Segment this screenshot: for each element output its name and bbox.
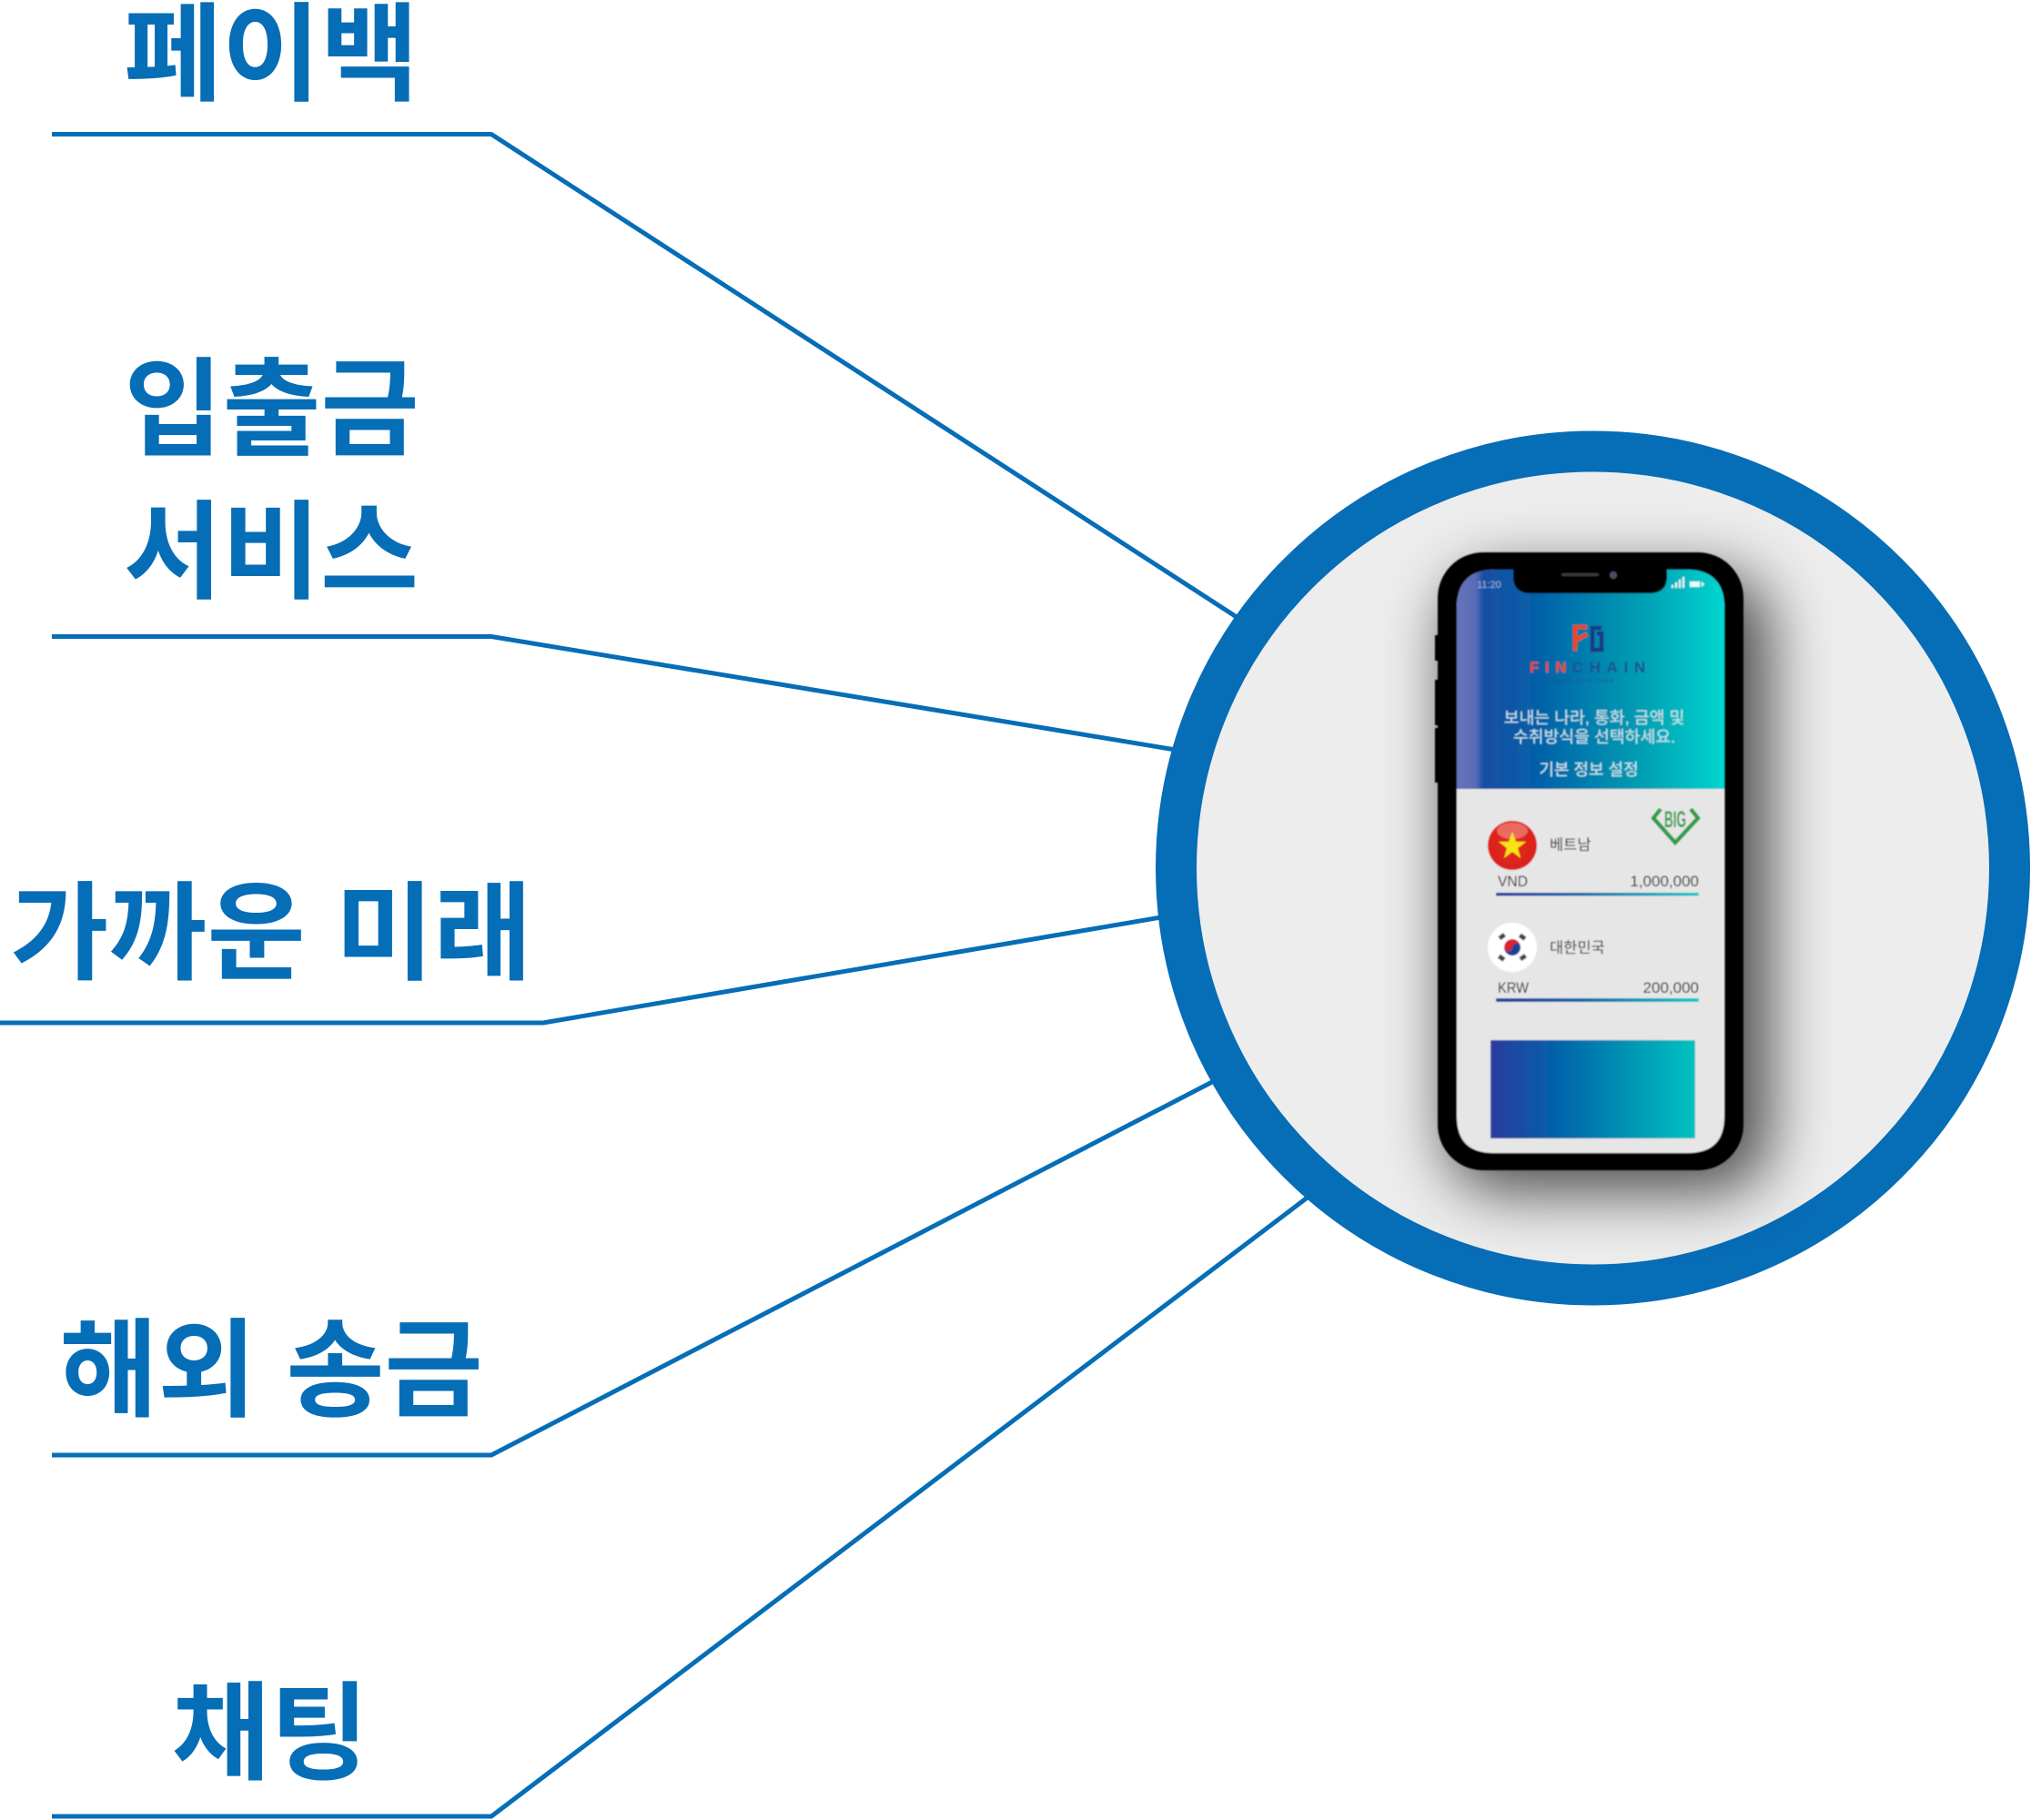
phone body — [1438, 552, 1743, 1170]
header message: 보내는 나라, 통화, 금액 및 — [1504, 708, 1684, 727]
notch — [1513, 568, 1667, 593]
BIG logo: BIG — [1664, 807, 1686, 833]
header subtitle: 기본 정보 설정 — [1539, 761, 1639, 779]
phone mockup — [1435, 552, 1743, 1170]
KRW row: 200,000 — [1643, 979, 1699, 996]
phone screen — [1457, 570, 1724, 1153]
BIG logo — [1653, 807, 1698, 843]
phone shadow — [1447, 573, 1770, 1192]
FINCHAIN wordmark: FINCHAIN — [1530, 659, 1652, 676]
Vietnam flag — [1488, 821, 1537, 870]
screen background — [1457, 570, 1724, 1153]
connector line: 해외 송금 — [52, 1081, 1214, 1455]
KRW row: KRW — [1498, 979, 1529, 996]
header message: 수취방식을 선택하세요. — [1513, 727, 1675, 746]
KRW row — [1498, 979, 1699, 996]
status time: 11:20 — [1477, 580, 1501, 591]
confirm button — [1490, 1040, 1695, 1138]
heading: 입출금 서비스 — [124, 323, 419, 621]
logo tagline: Fintech Joint Fund — [1545, 679, 1614, 684]
circle badge — [1176, 451, 2009, 1285]
battery icon — [1690, 581, 1704, 587]
connector line: 가까운 미래 — [0, 917, 1161, 1023]
KRW underline — [1496, 998, 1699, 1002]
connector line: 입출금 서비스 — [52, 637, 1176, 750]
heading: 채팅: 채팅 — [172, 1647, 369, 1802]
Vietnam label: 베트남 — [1550, 836, 1591, 854]
VND row: 1,000,000 — [1630, 873, 1699, 890]
VND row — [1498, 873, 1699, 890]
signal icon — [1672, 577, 1684, 588]
FC logo — [1575, 627, 1602, 651]
speaker and camera — [1561, 571, 1617, 579]
Korea flag — [1488, 923, 1537, 972]
heading: 가까운 미래: 가까운 미래 — [10, 847, 532, 1002]
phone side buttons — [1435, 635, 1440, 783]
VND row: VND — [1498, 873, 1528, 890]
heading: 입출금 서비스: 입출금 — [124, 323, 419, 478]
VND underline — [1496, 893, 1699, 895]
header gradient — [1457, 570, 1724, 789]
heading: 해외 송금: 해외 송금 — [59, 1284, 483, 1439]
Korea label: 대한민국 — [1550, 939, 1605, 956]
header message — [1504, 708, 1684, 746]
connector line: 채팅 — [52, 1197, 1309, 1816]
connector line: 페이백 — [52, 135, 1239, 619]
heading: 입출금 서비스: 서비스 — [124, 466, 419, 621]
